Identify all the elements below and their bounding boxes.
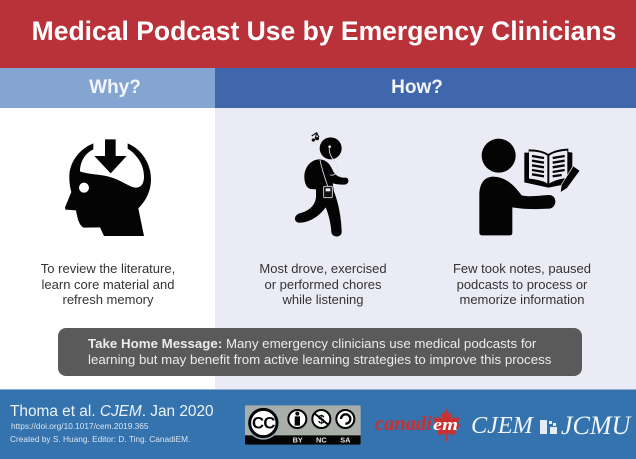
text: how driving [259, 261, 387, 307]
panel: why body [0, 108, 215, 390]
callout: take home message [58, 328, 582, 376]
CJEM wordmark: CJEM [471, 412, 533, 439]
logo: canadiEM: canadi [375, 413, 432, 435]
text: how driving: or performed chores [264, 277, 382, 292]
panel: how header [215, 68, 636, 108]
logo: canadiEM: em [433, 415, 458, 434]
callout: take home message: learning but may benefit from active learning strategies to improve this process [88, 352, 551, 367]
panel: how body [215, 108, 636, 390]
panel: why header [0, 68, 215, 108]
icon: creative commons badge [245, 405, 361, 445]
text: how notes: podcasts to process or [457, 277, 587, 292]
credits: Created by S. Huang. Editor: D. Ting. CanadiEM. [10, 434, 190, 444]
text: why: refresh memory [62, 292, 154, 307]
title banner [0, 0, 636, 68]
text: how driving: while listening [283, 292, 363, 307]
heading: why: Why? [89, 77, 141, 98]
logo: canadiEM [375, 408, 460, 442]
heading: how: How? [391, 77, 443, 98]
citation: Thoma et al. CJEM. Jan 2020 [10, 403, 214, 420]
text: why: To review the literature, [41, 261, 175, 276]
logo: CJEM JCMU [471, 411, 632, 440]
callout: take home message: Take Home Message: Many emergency clinicians use medical podcasts for [88, 336, 536, 351]
JCMU wordmark: JCMU [561, 411, 630, 440]
icon: creative commons badge: BY [293, 436, 303, 445]
icon: creative commons badge: NC [316, 436, 327, 445]
text: how driving: Most drove, exercised [259, 261, 387, 276]
text: why: learn core material and [42, 277, 174, 292]
title: Medical Podcast Use by Emergency Clinicians [32, 16, 616, 46]
text: how notes [453, 261, 591, 307]
footer [0, 389, 636, 459]
icon: creative commons badge: $ [318, 412, 325, 426]
icon: head with down arrow [65, 139, 151, 236]
icon: walking listener [294, 132, 348, 236]
text: why [41, 261, 175, 307]
doi link: https://doi.org/10.1017/cem.2019.365 [11, 421, 148, 431]
text: how notes: memorize information [460, 292, 584, 307]
text: how notes: Few took notes, paused [453, 261, 591, 276]
emblem [540, 420, 557, 434]
icon: creative commons badge: SA [340, 436, 351, 445]
icon: creative commons badge: CC [252, 414, 275, 433]
icon: reader with book and pencil [479, 138, 580, 236]
